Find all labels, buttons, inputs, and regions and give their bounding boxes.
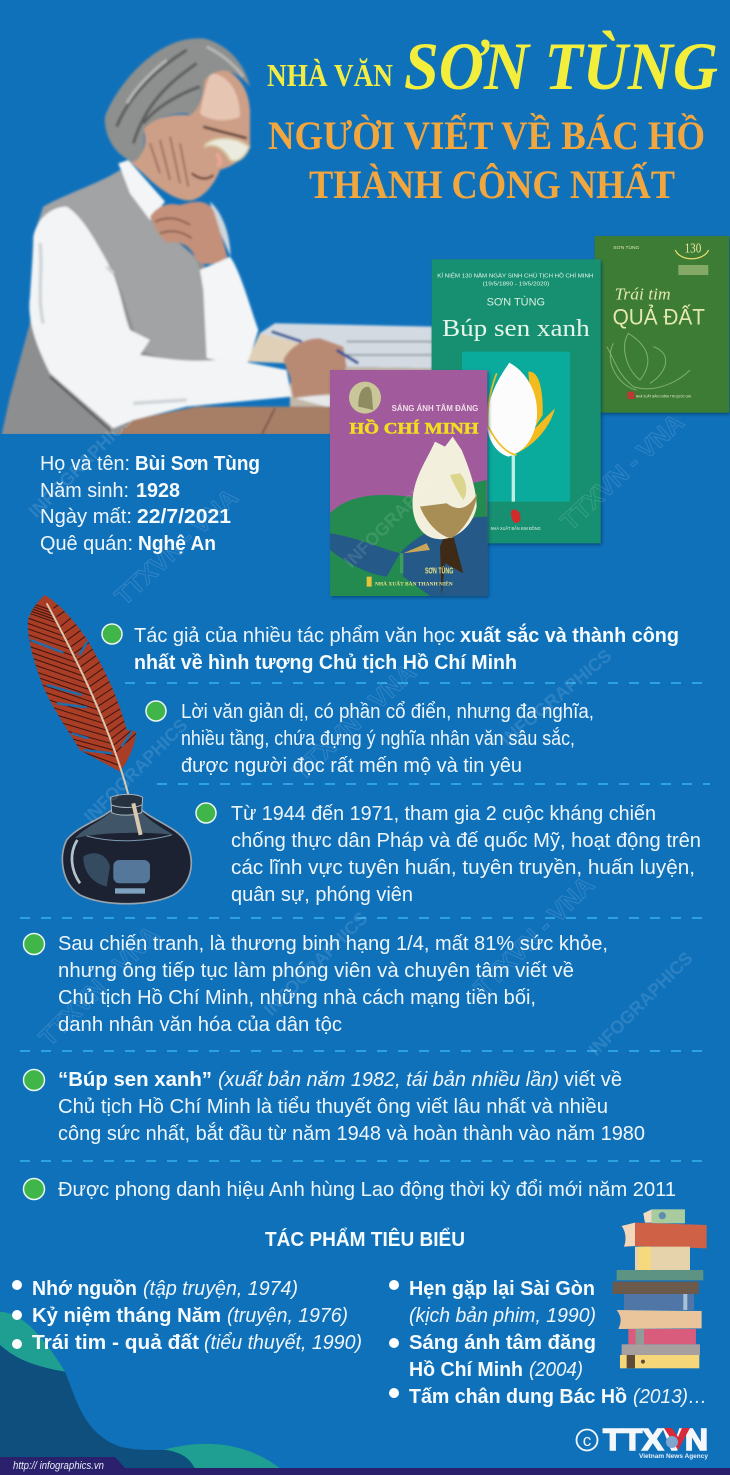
book: Trái tim quả đất: 130 [685,241,702,256]
bullet point 3: Từ 1944 đến 1971, tham gia 2 cuộc kháng chiến [231,803,656,825]
book: Trái tim quả đất: QUẢ ĐẤT [613,304,705,329]
title line: thành công nhất: THÀNH CÔNG NHẤT [309,162,675,207]
works list left: (tiểu thuyết, 1990) [204,1332,362,1354]
watermarks: TTXVN - VNA [469,871,600,1002]
watermarks [25,408,697,1060]
bottom corner wave decoration [0,1312,280,1468]
book: Búp sen xanh: (19/5/1890 - 19/5/2020) [483,282,550,288]
book: Búp sen xanh: NHÀ XUẤT BẢN KIM ĐỒNG [491,526,541,531]
sleeve [29,207,292,428]
title line: nhà văn: NHÀ VĂN [267,57,393,93]
personal info block: 1928 [136,480,180,502]
book: Trái tim quả đất [595,236,729,413]
watermarks: INFOGRAPHICS [497,645,615,749]
footer url label: http:// infographics.vn [13,1460,104,1472]
bullet point 4: Sau chiến tranh, là thương binh hạng 1/4, mất 81% sức khỏe, [58,933,608,955]
watermarks: INFOGRAPHICS [80,715,192,827]
footer url label [0,1457,125,1472]
book: Búp sen xanh: Búp sen xanh [442,316,590,342]
bullet point 5: Chủ tịch Hồ Chí Minh là tiểu thuyết ông viết lâu nhất và nhiều [58,1096,608,1118]
works list right: Tấm chân dung Bác Hồ [409,1386,627,1408]
writing hand [283,338,347,398]
bullet point 1: nhất về hình tượng Chủ tịch Hồ Chí Minh [134,652,517,674]
ink bottle neck [111,794,143,815]
book: Búp sen xanh: SƠN TÙNG [487,295,545,308]
personal info block: Năm sinh: [40,480,129,502]
works list right: (kịch bản phim, 1990) [409,1305,596,1327]
glasses [205,138,249,161]
bullet point 3: quân sự, phóng viên [231,884,413,906]
works list left: (tập truyện, 1974) [143,1278,298,1300]
vest [33,170,207,363]
book: Sáng ánh tâm đăng Hồ Chí Minh: HỒ CHÍ MINH [349,419,479,437]
feather shaft [47,603,129,798]
watermarks: INFOGRAPHICS [25,410,137,522]
bullet point 4: danh nhân văn hóa của dân tộc [58,1014,342,1036]
personal info block: Quê quán: [40,533,133,555]
bullet point 5: “Búp sen xanh” [58,1069,212,1091]
papers on desk [260,323,433,368]
book: Trái tim quả đất: NHÀ XUẤT BẢN CHÍNH TRỊ QUỐC GIA [636,393,691,398]
bullet point 1 [102,623,679,674]
bullet point 5: viết về [564,1069,622,1091]
works list right: Hồ Chí Minh [409,1359,523,1381]
works list right [389,1278,707,1408]
bullet point 1: xuất sắc và thành công [460,623,679,647]
watermarks: TTXVN - VNA [556,408,689,536]
bullet point 4: Chủ tịch Hồ Chí Minh, những nhà cách mạng tiền bối, [58,987,536,1009]
bullet point 3 [196,803,701,906]
bullet point 5: công sức nhất, bắt đầu từ năm 1948 và hoàn thành vào năm 1980 [58,1122,645,1145]
works list left: (truyện, 1976) [227,1305,348,1327]
watermarks: INFOGRAPHICS [585,948,697,1060]
logo: TTXVN: TTXVN [603,1422,708,1457]
bullet point 4: nhưng ông tiếp tục làm phóng viên và chuyên tâm viết về [58,960,574,982]
watermarks: TTXVN - VNA [34,921,165,1052]
works list right: (2013)… [633,1386,707,1408]
works list right: (2004) [529,1359,583,1381]
icon: feather quill and ink bottle [20,590,191,904]
bullet point 6: Được phong danh hiệu Anh hùng Lao động thời kỳ đổi mới năm 2011 [58,1179,676,1201]
book covers [330,236,729,596]
logo: TTXVN: Vietnam News Agency [639,1453,708,1460]
bullet point 5 [24,1069,645,1145]
book: Búp sen xanh [432,259,601,543]
quill tip in ink [133,803,141,835]
personal info block [40,453,260,555]
book: Sáng ánh tâm đăng Hồ Chí Minh: SƠN TÙNG [425,566,453,575]
bullet point 3: chống thực dân Pháp và đế quốc Mỹ, hoạt động trên [231,830,701,852]
works list left: Kỷ niệm tháng Năm [32,1305,221,1327]
book: Sáng ánh tâm đăng Hồ Chí Minh: SÁNG ÁNH TÂM ĐĂNG [392,402,478,413]
icon: stack of books [613,1209,707,1368]
works list left: Nhớ nguồn [32,1278,137,1300]
hand at chin [150,202,227,264]
book: Búp sen xanh: KỈ NIỆM 130 NĂM NGÀY SINH CHỦ TỊCH HỒ CHÍ MINH [437,272,593,280]
desk [110,407,433,435]
title [267,28,718,207]
book: Trái tim quả đất: Trái tim [615,284,671,303]
pen [272,332,358,363]
bullet point 2: được người đọc rất mến mộ và tin yêu [181,755,522,777]
works list right: Hẹn gặp lại Sài Gòn [409,1278,595,1300]
chest shirt and forearm [200,257,258,365]
body underlay [2,170,253,435]
bullet point 2: nhiều tầng, chứa đựng ý nghĩa nhân văn sâu sắc, [181,727,575,750]
footer bar [0,1468,730,1475]
personal info block: 22/7/2021 [137,506,231,528]
hair [105,38,250,162]
bullet point 2: Lời văn giản dị, có phần cổ điển, nhưng đa nghĩa, [181,701,594,723]
bullet point 1: Tác giả của nhiều tác phẩm văn học [134,625,455,647]
personal info block: Bùi Sơn Tùng [135,453,260,475]
face [130,66,250,201]
personal info block: Ngày mất: [40,506,132,528]
lower vest [2,323,112,435]
bullet point 2 [146,701,594,777]
personal info block: Họ và tên: [40,453,130,475]
logo: TTXVN: c [583,1431,592,1450]
works list right: Sáng ánh tâm đăng [409,1332,596,1354]
ink bottle body [62,810,191,904]
bullet point 4 [24,933,608,1036]
watermarks: TTXVN - VNA [288,658,421,786]
watermarks: TTXVN - VNA [110,483,243,611]
book: Trái tim quả đất: SƠN TÙNG [613,244,640,250]
works list left: Trái tim - quả đất [32,1332,199,1354]
portrait: writer at desk [2,38,433,435]
bullet point 3: các lĩnh vực tuyên huấn, tuyên truyền, huấn luyện, [231,857,695,879]
heading: representative works: TÁC PHẨM TIÊU BIỂU [265,1227,465,1251]
works list left [12,1278,362,1354]
personal info block: Nghệ An [138,533,216,555]
watermarks: INFOGRAPHICS [340,460,452,572]
bullet point 5: (xuất bản năm 1982, tái bản nhiều lần) [218,1069,559,1091]
book: Sáng ánh tâm đăng Hồ Chí Minh [330,370,487,596]
feather vane [28,595,136,772]
watermarks: INFOGRAPHICS [260,908,372,1020]
collar [118,160,165,220]
book: Sáng ánh tâm đăng Hồ Chí Minh: NHÀ XUẤT BẢN THANH NIÊN [375,582,453,588]
